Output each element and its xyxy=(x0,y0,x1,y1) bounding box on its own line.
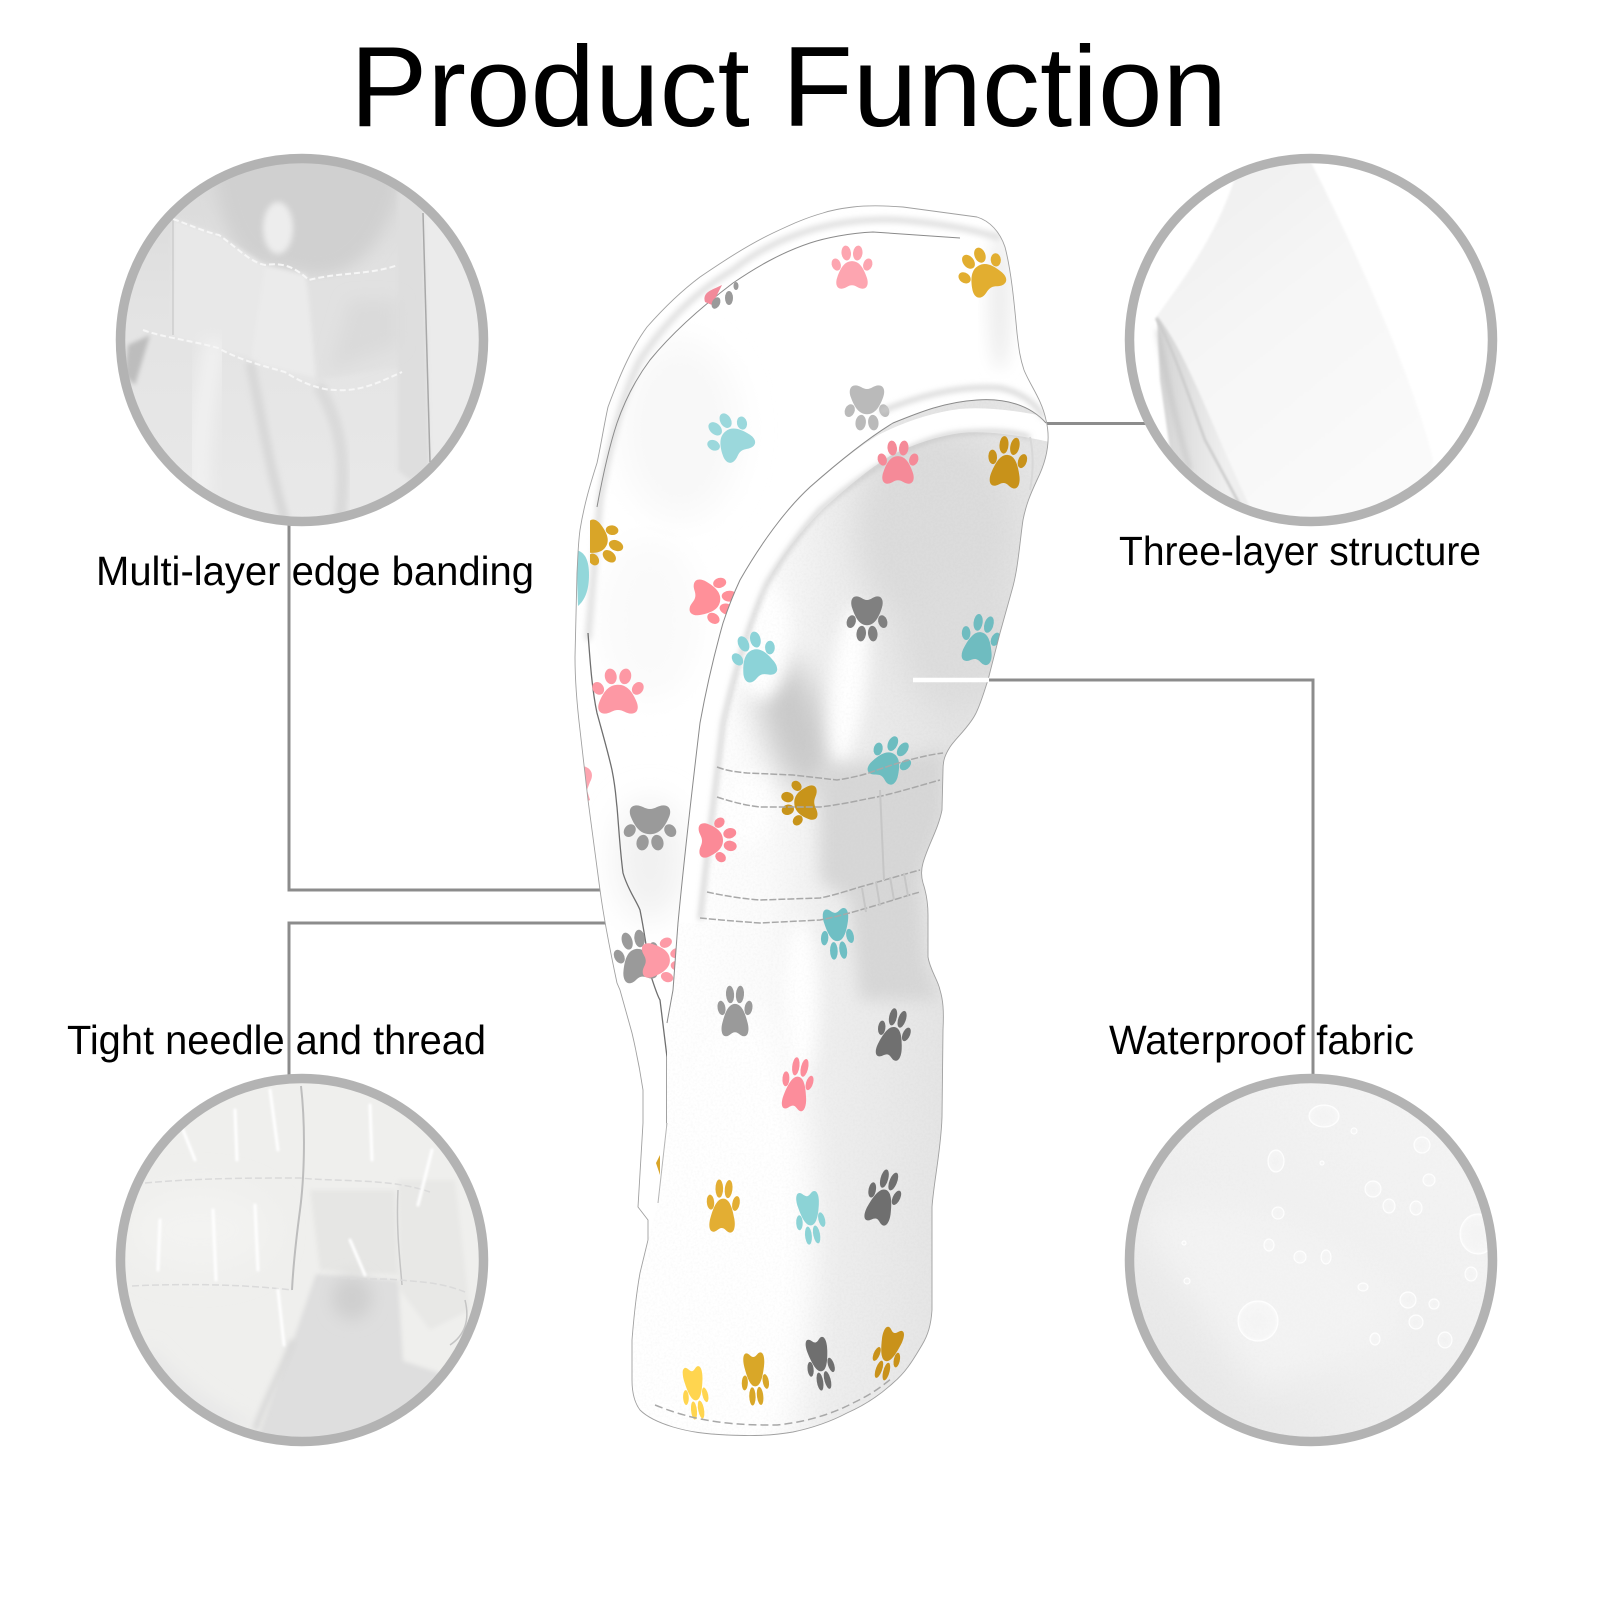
stitch lines xyxy=(143,219,402,390)
leader line: multi-layer edge banding xyxy=(289,525,602,890)
detail circle: tight needle and thread xyxy=(116,1074,488,1446)
seam binding xyxy=(762,408,1048,572)
outer edge xyxy=(575,206,1048,1436)
sheen highlights xyxy=(158,1090,432,1345)
stitch lines xyxy=(132,1178,465,1292)
rear panel paw prints xyxy=(570,238,1015,1175)
water droplets xyxy=(1182,1105,1496,1348)
leader line: three-layer structure xyxy=(1047,422,1147,425)
label: waterproof fabric: Waterproof fabric xyxy=(1109,1017,1414,1063)
front panel seam line xyxy=(667,400,1046,1023)
label: tight needle and thread: Tight needle and thread xyxy=(67,1017,486,1063)
detail circle: multi-layer edge banding xyxy=(116,150,500,526)
detail circle: waterproof fabric xyxy=(1125,1074,1497,1446)
label: multi-layer edge banding: Multi-layer edge banding xyxy=(96,548,534,594)
front panel paw prints xyxy=(678,433,1032,1422)
bottom stitching xyxy=(655,1378,892,1425)
leader line: tight needle and thread xyxy=(289,923,606,1075)
label: three-layer structure: Three-layer structure xyxy=(1119,528,1481,574)
gather puckers xyxy=(862,790,908,912)
front panel xyxy=(654,400,1048,1432)
product: white golf club headcover with paw prints xyxy=(560,190,1060,1470)
gathered stitching xyxy=(700,753,943,923)
fabric shading xyxy=(670,430,1020,1470)
leader line: waterproof fabric xyxy=(989,680,1313,1075)
title: Product Function xyxy=(350,24,1227,151)
detail circle: three-layer structure xyxy=(1125,154,1497,530)
white pointer segment xyxy=(913,678,989,682)
rear panel xyxy=(577,215,1012,1175)
